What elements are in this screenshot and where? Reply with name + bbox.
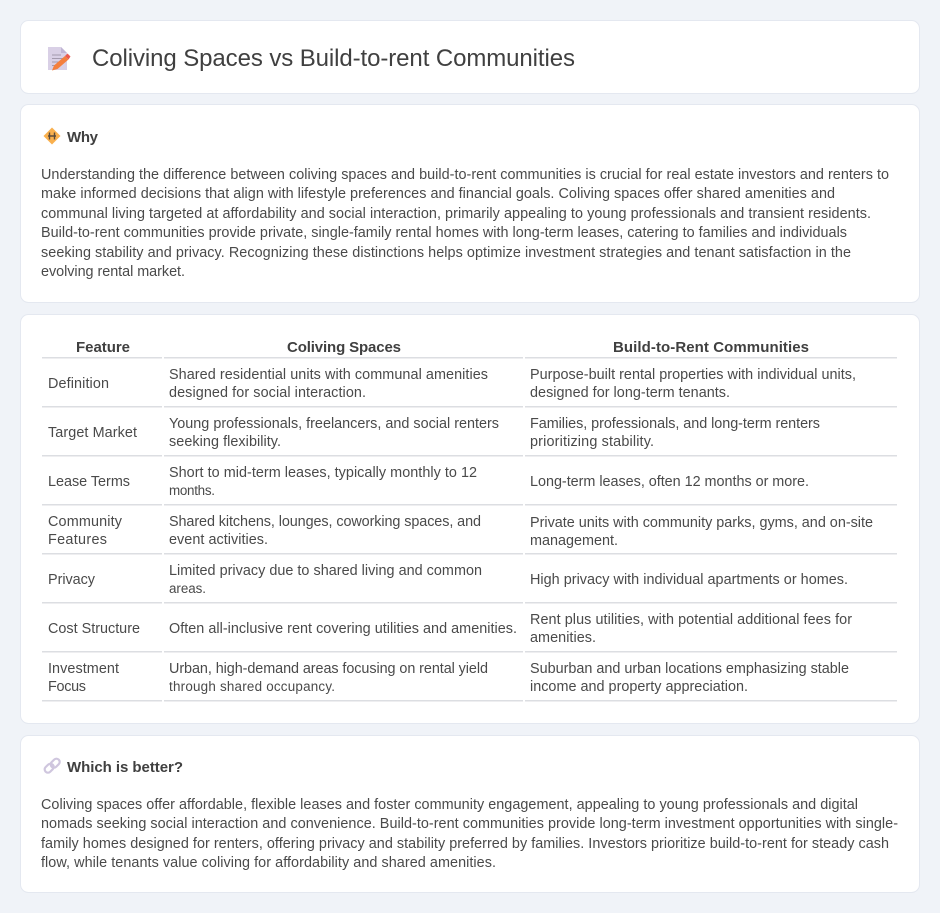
row: investment focus [48, 661, 849, 695]
row: lease terms [48, 465, 809, 498]
table header row: Feature [76, 339, 130, 356]
row: definition: designed for long-term tenants. [530, 385, 730, 401]
row: community features: Features [48, 532, 107, 548]
text block: why paragraph: seeking stability and privacy. Recognizing these distinctions helps optimize investment strategies and tenant satisfaction in the [41, 245, 851, 261]
row: privacy: areas. [169, 581, 206, 596]
text block: which is better paragraph: nomads seeking social interaction and convenience. Build-to-rent communities provide long-term investment opportunities with single- [41, 816, 898, 832]
table header row: Build-to-Rent Communities [613, 339, 809, 356]
row: lease terms: Long-term leases, often 12 months or more. [530, 474, 809, 490]
text block: why paragraph: communal living targeted at affordability and social interaction, primarily appealing to young professionals and transient residents. [41, 206, 871, 222]
panel: title header [20, 20, 920, 94]
row: community features: event activities. [169, 532, 268, 548]
panel: why [20, 104, 920, 302]
table header row: Coliving Spaces [287, 339, 401, 356]
row: definition: designed for social interaction. [169, 385, 366, 401]
row: privacy: Limited privacy due to shared living and common [169, 563, 482, 579]
text block: which is better paragraph: Coliving spaces offer affordable, flexible leases and foster community engagement, appealing to young professionals and digital [41, 797, 858, 813]
row: investment focus: income and property appreciation. [530, 679, 748, 695]
row: target market: Target Market [48, 425, 137, 441]
row: definition: Shared residential units with communal amenities [169, 367, 488, 383]
row: privacy: Privacy [48, 572, 96, 588]
text block: why paragraph: Understanding the difference between coliving spaces and build-to-rent communities is crucial for real estate investors and renters to [41, 167, 889, 183]
row: lease terms: Short to mid-term leases, typically monthly to 12 [169, 465, 477, 481]
row: investment focus: Urban, high-demand areas focusing on rental yield [169, 661, 488, 677]
row: cost structure [48, 612, 852, 646]
panel: comparison table [20, 314, 920, 724]
row: definition: Definition [48, 376, 109, 392]
table header row [76, 339, 809, 356]
row: community features: management. [530, 533, 618, 549]
row: privacy: High privacy with individual apartments or homes. [530, 572, 848, 588]
title: Coliving Spaces vs Build-to-rent Communities [92, 45, 575, 72]
row: cost structure: Often all-inclusive rent covering utilities and amenities. [169, 621, 517, 637]
row: target market: prioritizing stability. [530, 434, 654, 450]
panel: which is better [20, 736, 920, 892]
text block: why paragraph: Build-to-rent communities provide private, single-family rental homes with long-term leases, catering to families and individuals [41, 225, 847, 241]
row: definition: Purpose-built rental properties with individual units, [530, 367, 856, 383]
row: target market: Young professionals, freelancers, and social renters [169, 416, 499, 432]
icon: document with pencil [48, 47, 70, 70]
text block: why paragraph: make informed decisions that align with lifestyle preferences and financial goals. Coliving spaces offer shared amenities and [41, 186, 835, 202]
row: community features: Community [48, 514, 123, 530]
row: cost structure: amenities. [530, 630, 596, 646]
text block: why paragraph: evolving rental market. [41, 264, 185, 280]
heading: which is better: Which is better? [67, 759, 183, 776]
row: investment focus: through shared occupancy. [169, 679, 335, 694]
row: community features: Private units with community parks, gyms, and on-site [530, 515, 873, 531]
heading: why: Why [67, 129, 99, 146]
text block: which is better paragraph: flow, while tenants value coliving for affordability and shared amenities. [41, 855, 496, 871]
icon: diamond sign [44, 128, 60, 144]
row: cost structure: Rent plus utilities, with potential additional fees for [530, 612, 852, 628]
row: investment focus: Investment [48, 661, 119, 677]
text block: which is better paragraph: family homes designed for renters, offering privacy and stability preferred by families. Investors prioritize build-to-rent for steady cash [41, 836, 889, 852]
row: definition [48, 367, 856, 401]
row: target market [48, 416, 820, 450]
row: privacy [48, 563, 848, 596]
row: lease terms: months. [169, 483, 215, 498]
row: lease terms: Lease Terms [48, 474, 130, 490]
row: community features: Shared kitchens, lounges, coworking spaces, and [169, 514, 481, 530]
icon: chain link [43, 757, 61, 774]
text block: which is better paragraph [41, 797, 898, 871]
row: target market: Families, professionals, and long-term renters [530, 416, 820, 432]
text block: why paragraph [41, 167, 889, 280]
row: investment focus: Focus [48, 679, 86, 695]
row: target market: seeking flexibility. [169, 434, 281, 450]
row: investment focus: Suburban and urban locations emphasizing stable [530, 661, 849, 677]
row: cost structure: Cost Structure [48, 621, 140, 637]
row: community features [48, 514, 873, 549]
